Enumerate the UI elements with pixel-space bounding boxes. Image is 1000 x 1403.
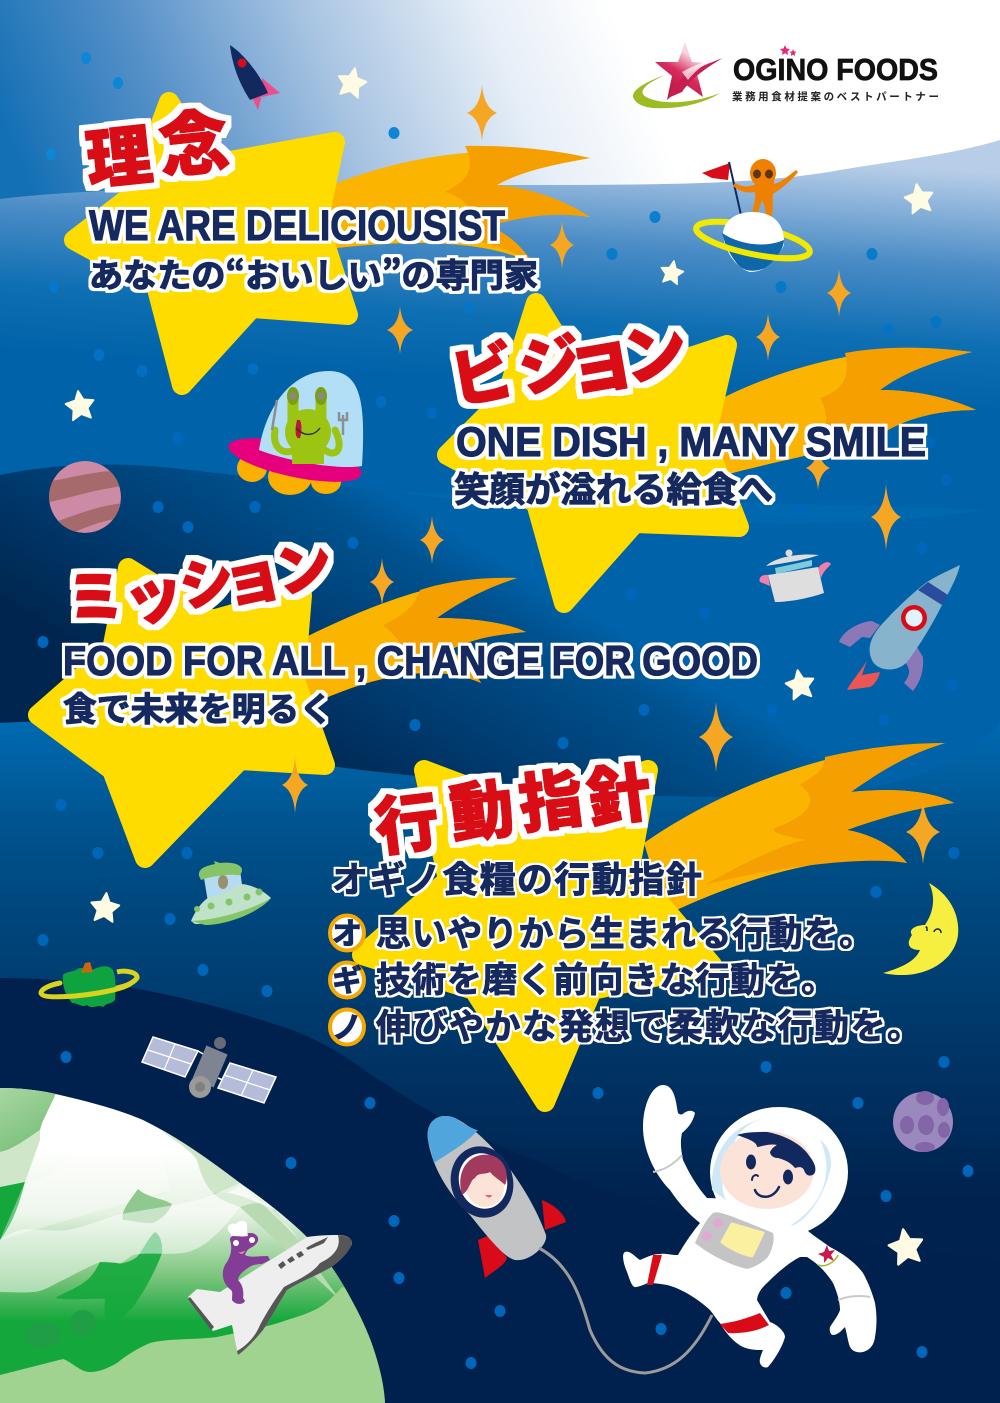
heading: 理念: 念 (153, 86, 234, 193)
heading: ミッション: シ (171, 534, 241, 623)
text: mission statement: 食で未来を明るく (63, 682, 333, 731)
logo: Ogino Foods: 業務用食材提案のベストパートナー (732, 89, 939, 104)
icon: green alien in pink UFO (225, 371, 365, 495)
shooting star: vision (447, 303, 976, 603)
icon: navy rocket (230, 45, 280, 110)
icon: grey rocket with child in window (428, 1116, 566, 1278)
heading: 行動指針: 指 (513, 747, 588, 847)
text: philosophy statement: あなたの“おいしい”の専門家 (89, 249, 538, 297)
icon: green flying saucer (191, 861, 271, 925)
heading: ミッション: ョ (213, 525, 289, 622)
text: philosophy statement (89, 202, 538, 297)
heading: 理念 (81, 86, 234, 204)
heading: 行動指針: 動 (444, 757, 519, 857)
logo: Ogino Foods: OGINO FOODS (733, 52, 938, 87)
text: guidelines subheading: オギノ食糧の行動指針 (332, 851, 702, 903)
icon: cooking pot (759, 550, 831, 602)
heading: ビジョン: ン (615, 298, 694, 400)
text: mission statement: FOOD FOR ALL , CHANGE FOR GOOD (63, 637, 758, 684)
text: philosophy statement: WE ARE DELICIOUSIST (89, 202, 505, 250)
shooting star: mission (38, 568, 526, 858)
icon: blue rocket with purple fins (839, 565, 960, 691)
icon: purple cratered planet (893, 1091, 953, 1152)
heading: ビジョン: ジ (511, 310, 587, 410)
heading: 行動指針: 行 (369, 770, 444, 870)
icon: satellite (142, 1037, 276, 1103)
icon: striped pink planet (49, 461, 121, 533)
cream stars (64, 65, 935, 1265)
text: mission statement (63, 637, 758, 731)
safety cord (539, 1248, 712, 1373)
illustration: astronaut (623, 1085, 876, 1368)
heading: ビジョン: ビ (443, 320, 522, 422)
logo: Ogino Foods (633, 42, 939, 108)
guideline 2: ギ (332, 956, 362, 1000)
guideline 2: 技術を磨く前向きな行動を。 (376, 952, 836, 1003)
text: vision statement: 笑顔が溢れる給食へ (454, 462, 773, 513)
guideline 1: オ (332, 909, 362, 953)
guideline 1: 思いやりから生まれる行動を。 (376, 906, 874, 957)
text: vision statement: ONE DISH , MANY SMILE (456, 418, 926, 465)
heading: 理念: 理 (81, 102, 156, 204)
icon: crescent moon (883, 883, 958, 975)
icon: space shuttle with purple chef alien (188, 1221, 352, 1355)
text: vision statement (454, 418, 926, 513)
decorative sparkles (282, 85, 940, 864)
icon: alien on rice bowl planet (693, 159, 813, 272)
heading: ビジョン (443, 297, 694, 422)
shooting star: philosophy (74, 102, 590, 385)
guideline 3: ノ (332, 1003, 362, 1047)
heading: ミッション: ッ (115, 543, 191, 640)
heading: 行動指針 (369, 741, 656, 870)
heading: ミッション: ン (267, 519, 339, 610)
shooting star: action guidelines (362, 743, 954, 1102)
heading: ビジョン: ョ (554, 297, 644, 413)
heading: 行動指針: 針 (581, 741, 656, 841)
heading: ミッション: ミ (57, 546, 131, 640)
guideline 3: 伸びやかな発想で柔軟な行動を。 (376, 999, 922, 1050)
earth with clouds and continents (0, 1085, 400, 1403)
heading: ミッション (57, 519, 339, 640)
icon: green pepper planet with ring (41, 962, 137, 1007)
